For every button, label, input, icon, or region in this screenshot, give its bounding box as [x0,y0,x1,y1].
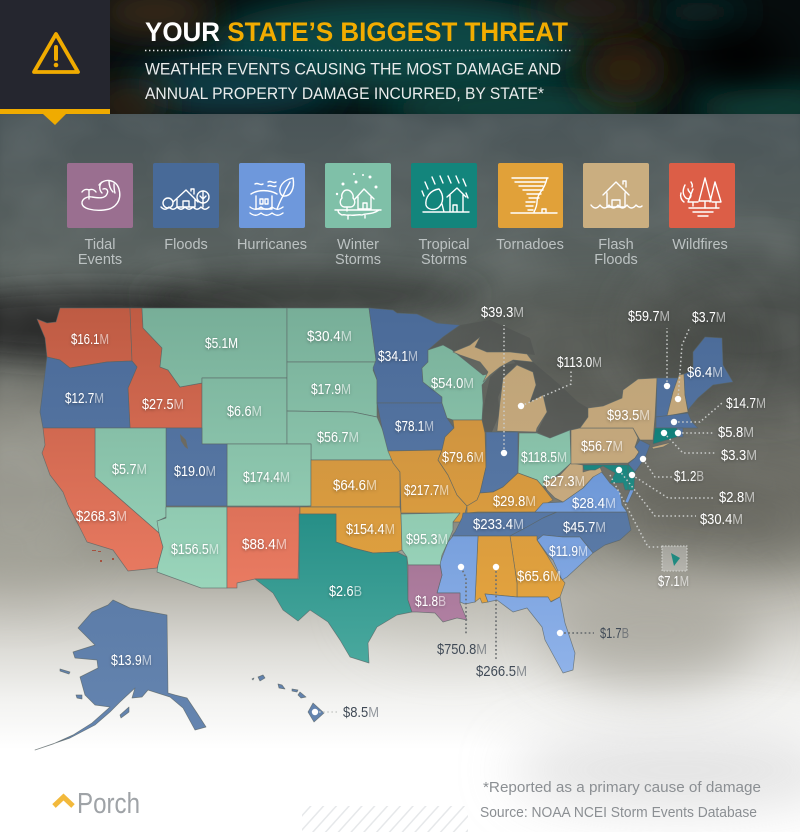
value labels: $28.4M [572,496,616,512]
value labels: $34.1M [378,349,418,365]
legend item: tropical storms [411,163,477,268]
state: North Carolina [510,512,631,553]
value labels: $78.1M [395,419,434,435]
value labels: $233.4M [473,517,524,533]
great lakes [428,320,588,438]
value labels [65,305,766,669]
state: Iowa [377,403,454,451]
legend item: wildfires: Wildfires [672,237,728,253]
value labels: $88.4M [242,537,287,553]
legend item: flash floods [583,163,649,268]
state: Virginia eastern shore [625,490,634,503]
state: Georgia [510,536,565,602]
Porch logo: Porch [77,788,140,820]
value labels: $174.4M [243,470,290,486]
value labels: $30.4M [307,329,352,345]
state: Hawaii [252,675,324,722]
legend item: hurricanes [237,163,307,253]
footnote [480,780,761,821]
state: Illinois [438,420,486,506]
icon: warning triangle [34,34,78,72]
value labels: $79.6M [442,450,484,466]
state: West Virginia [543,463,602,502]
legend item: flash floods: Flash [598,237,634,253]
state: Long Island [652,442,672,449]
state: Nebraska [287,411,392,460]
state: Texas [255,514,412,663]
state: Wyoming [202,378,287,444]
value labels: $1.2B [674,469,704,485]
header band [110,0,800,114]
value labels: $13.9M [111,653,152,669]
state: New York [580,378,657,440]
leader dots [312,383,681,715]
footnote: Source: NOAA NCEI Storm Events Database [480,805,757,821]
value labels: $2.6B [329,584,362,600]
state: Vermont [656,378,678,417]
value labels: $95.3M [406,532,448,548]
legend item: floods: Floods [164,237,208,253]
legend item: hurricanes: Hurricanes [237,237,307,253]
subtitle: WEATHER EVENTS CAUSING THE MOST DAMAGE AND [145,60,561,78]
value labels: $154.4M [346,522,395,538]
state: Wisconsin [422,345,492,420]
legend [67,163,735,268]
value labels: $93.5M [607,408,650,424]
state: Kentucky [467,473,553,513]
state: Nevada [95,428,166,533]
state: Louisiana [408,565,467,622]
state: Alabama [475,536,517,603]
state: New Jersey [628,440,650,472]
legend item: winter storms: Storms [335,252,381,268]
state: Mississippi [437,536,478,604]
value labels: $5.8M [718,425,754,441]
title: YOUR STATE’S BIGGEST THREAT [145,17,568,47]
value labels: $1.8B [415,594,446,610]
value labels: $16.1M [71,332,109,348]
dark value labels: $1.7B [600,626,629,642]
value labels: $56.7M [317,430,359,446]
value labels: $3.7M [692,310,726,326]
state: Utah [166,428,227,506]
state: Montana [142,308,287,387]
state: Rhode Island [677,428,683,437]
legend item: winter storms [325,163,391,268]
legend item: tropical storms: Storms [421,252,467,268]
state: South Carolina [537,535,593,580]
legend item: wildfires [669,163,735,253]
subtitle [145,60,561,103]
state: Alaska [35,600,206,750]
legend item: tidal events: Events [78,252,122,268]
value labels: $27.5M [142,397,184,413]
SF/Channel islands [92,550,114,562]
state: Oklahoma [300,507,402,553]
state: North Dakota [287,308,377,362]
map of US states [35,308,733,750]
value labels: $17.9M [311,382,351,398]
value labels: $14.7M [726,396,766,412]
value labels: $27.3M [543,474,585,490]
state: New Hampshire [667,374,688,416]
dark value labels: $8.5M [343,705,379,721]
state: Arkansas [401,513,460,565]
value labels: $6.4M [687,365,723,381]
state: Michigan upper [453,337,533,382]
legend item: tornadoes [496,163,564,253]
state: Delaware [628,464,635,490]
value labels: $5.1M [205,336,238,352]
state: Virginia [535,470,627,512]
state: Massachusetts [656,413,698,428]
legend item: winter storms: Winter [337,237,379,253]
state: Colorado [227,444,311,506]
state: Kansas [300,460,400,507]
DC callout [662,546,687,571]
leader lines [315,325,722,712]
state: Maine [684,337,733,410]
legend item: floods [153,163,219,253]
value labels: $64.6M [333,478,377,494]
state: Minnesota [369,308,460,403]
value labels: $54.0M [431,376,474,392]
value labels: $19.0M [174,464,216,480]
value labels: $65.6M [517,569,561,585]
subtitle: ANNUAL PROPERTY DAMAGE INCURRED, BY STATE* [145,84,544,103]
state: Connecticut [653,428,677,444]
state: Florida [485,594,575,673]
state: Ohio [518,430,571,487]
state: Alaska islands [60,669,129,718]
state: Pennsylvania [571,428,639,464]
value labels: $39.3M [481,305,524,321]
state: Oregon [40,357,137,428]
value labels: $56.7M [581,439,623,455]
state: California [42,428,163,571]
state: Indiana [480,432,518,493]
value labels: $45.7M [563,520,606,536]
legend item: tidal events: Tidal [85,237,115,253]
value labels: $59.7M [628,309,670,325]
value labels: $7.1M [658,574,689,590]
legend item: tidal events [67,163,133,268]
legend item: tornadoes: Tornadoes [496,237,564,253]
dark value labels [343,626,629,721]
Salt Lake [180,434,188,449]
value labels: $118.5M [521,450,567,466]
state: Washington [37,308,132,368]
state: Idaho [128,308,202,428]
value labels: $2.8M [719,490,755,506]
state: South Dakota [287,362,377,417]
value labels: $268.3M [76,509,127,525]
dark value labels: $266.5M [476,664,527,680]
state: Missouri [388,450,467,522]
state: New Mexico [227,507,300,588]
dark value labels: $750.8M [437,642,487,658]
legend item: tropical storms: Tropical [418,237,470,253]
state: Tennessee [452,512,557,536]
state: Maryland [583,465,633,490]
value labels: $6.6M [227,404,262,420]
state: Arizona [157,507,227,588]
footnote: *Reported as a primary cause of damage [483,780,761,796]
state: Michigan lower [497,365,547,432]
value labels: $12.7M [65,391,104,407]
warning panel [0,0,110,125]
value labels: $113.0M [557,355,602,371]
value labels: $30.4M [700,512,743,528]
value labels: $156.5M [171,542,219,558]
legend item: flash floods: Floods [594,252,638,268]
value labels: $11.9M [549,544,588,560]
value labels: $3.3M [721,448,757,464]
value labels: $5.7M [112,462,147,478]
value labels: $29.8M [493,494,536,510]
Porch logo [54,788,140,820]
value labels: $217.7M [404,483,449,499]
